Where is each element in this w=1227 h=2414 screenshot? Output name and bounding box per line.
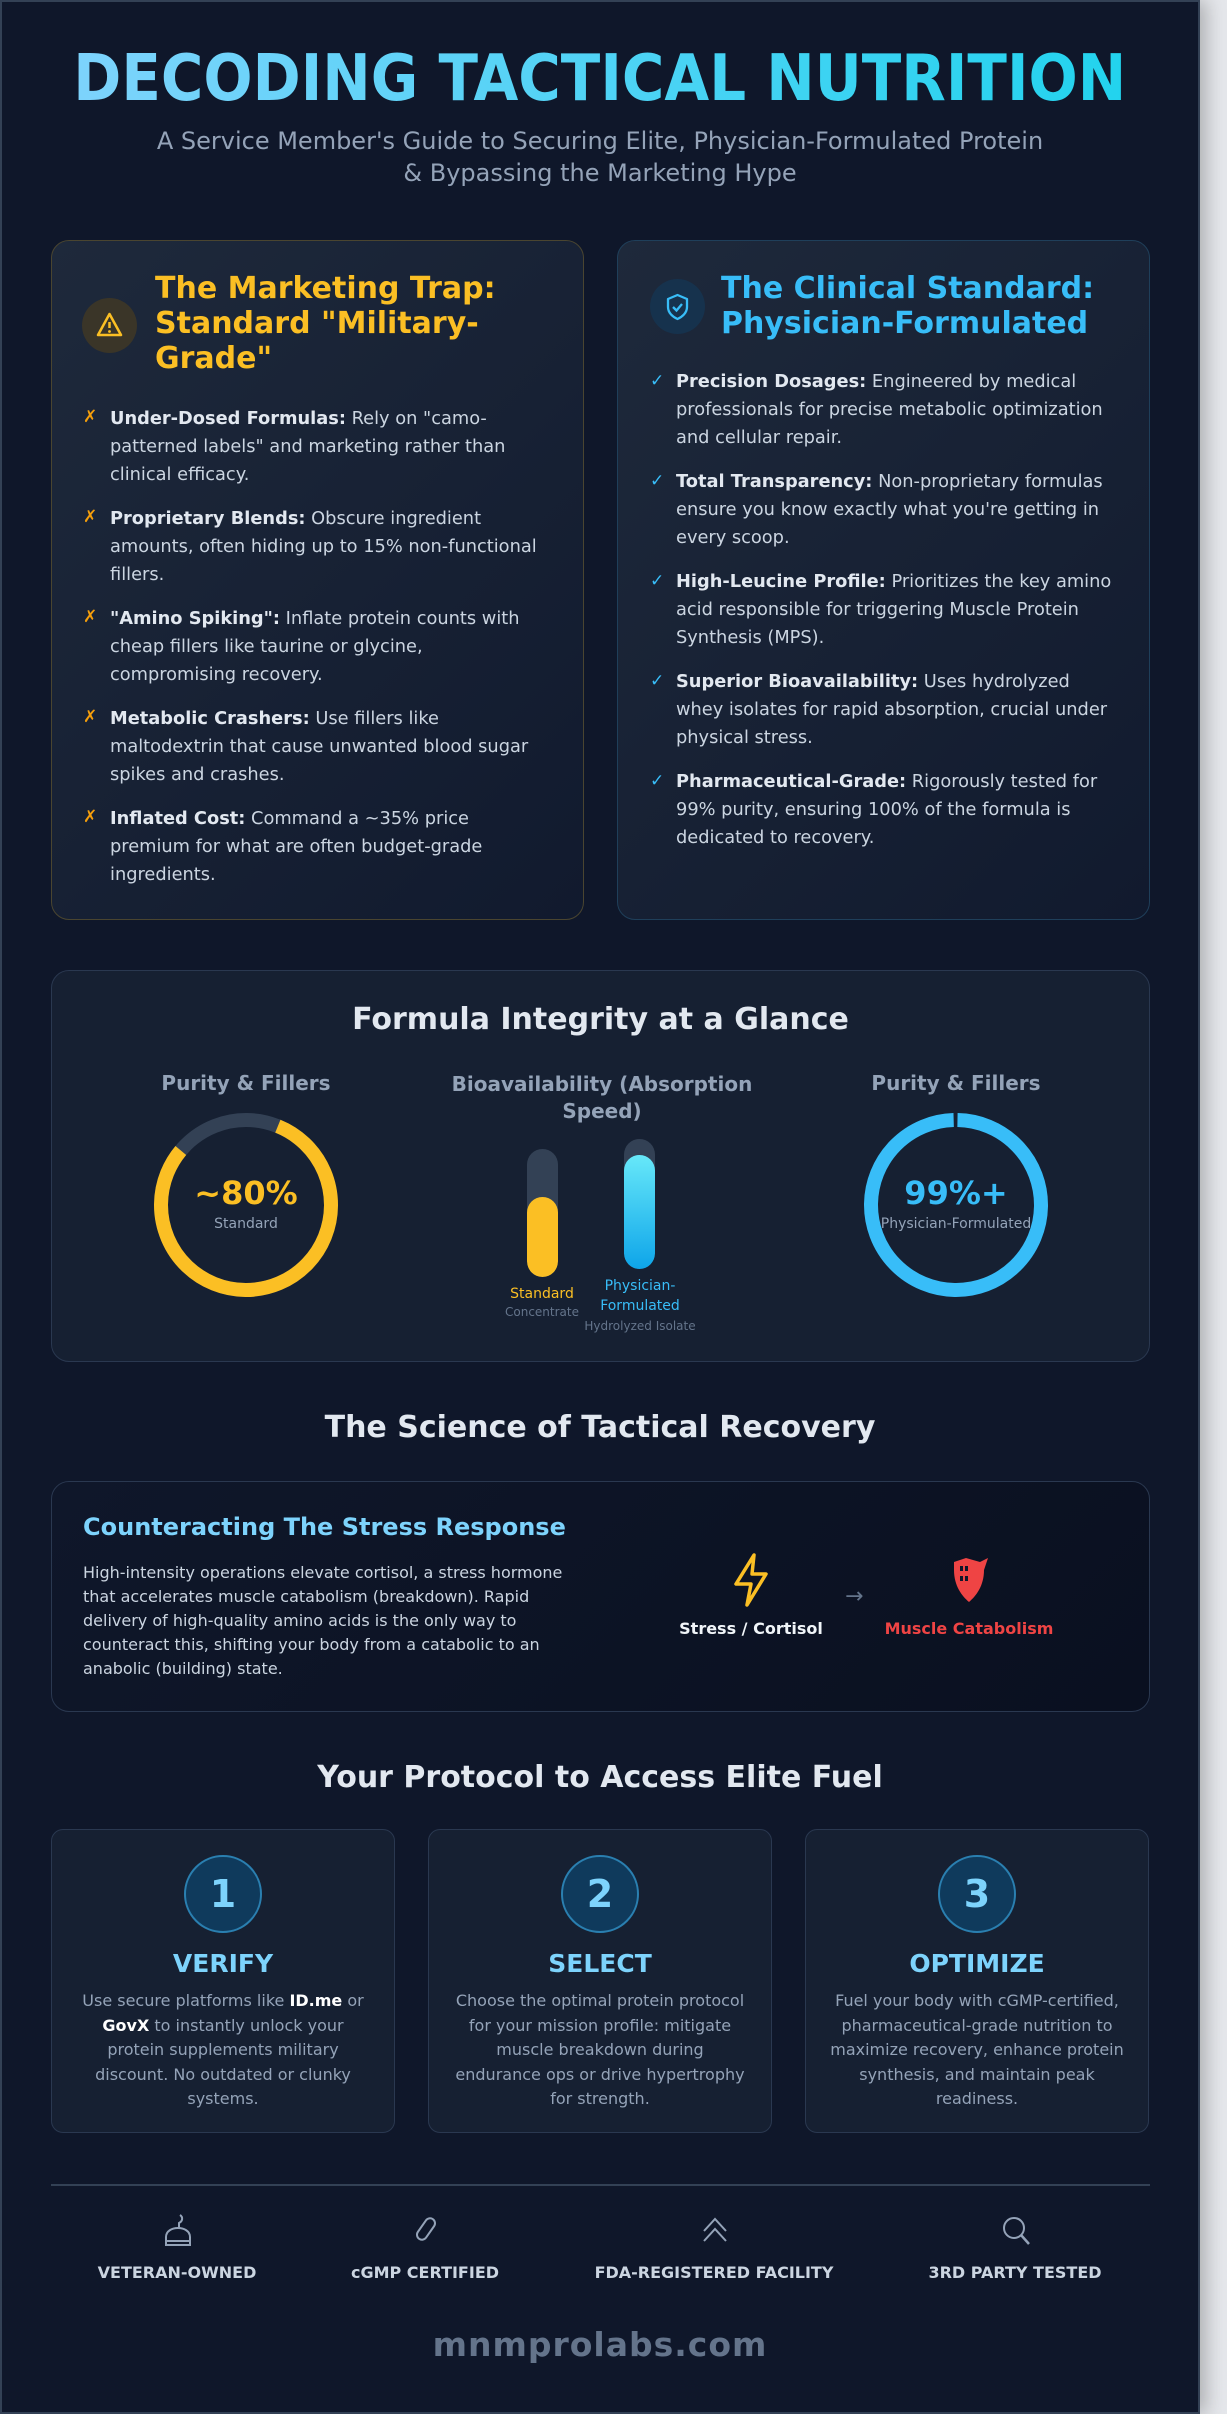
list: traps: fillers.: [110, 564, 164, 585]
chart: standard purity donut: [154, 1071, 338, 1297]
list: standards: Pharmaceutical-Grade: Rigorously tested for: [676, 771, 1097, 792]
panel: marketing trap: [51, 240, 584, 920]
card: verify: GovX to instantly unlock your: [102, 2016, 344, 2034]
heading: The Clinical Standard:: [721, 271, 1094, 306]
chart: physician purity donut: [864, 1071, 1048, 1297]
list: standards: physical stress.: [676, 727, 813, 748]
list: standards: [650, 371, 1111, 848]
icon: stress bolt: Stress / Cortisol: [679, 1619, 823, 1638]
chart: bioavailability bars: Standard: [510, 1286, 574, 1302]
card: select: [428, 1829, 772, 2133]
heading: Grade": [155, 341, 272, 376]
chart: bioavailability bars: Hydrolyzed Isolate: [584, 1319, 696, 1333]
card: select: Choose the optimal protein protocol: [456, 1991, 744, 2010]
list: traps: amounts, often hiding up to 15% non-functional: [110, 536, 537, 557]
heading: Physician-Formulated: [721, 306, 1088, 341]
list: traps: Inflated Cost: Command a ~35% price: [110, 808, 469, 829]
card: optimize: readiness.: [936, 2089, 1018, 2108]
icon: third party tested: [928, 2217, 1102, 2282]
list: standards: ✓: [650, 371, 664, 391]
heading: [155, 271, 496, 376]
card: select: for strength.: [550, 2089, 650, 2108]
list: standards: Synthesis (MPS).: [676, 627, 824, 648]
chart: physician purity donut: Physician-Formulated: [881, 1216, 1031, 1232]
list: standards: Precision Dosages: Engineered by medical: [676, 371, 1076, 392]
icon: cgmp: [351, 2217, 499, 2282]
chart: standard purity donut: ~80%: [194, 1174, 298, 1212]
list: standards: Superior Bioavailability: Uses hydrolyzed: [676, 671, 1070, 692]
card: select: for your mission profile: mitigate: [469, 2016, 731, 2034]
list: traps: cheap fillers like taurine or glycine,: [110, 636, 423, 657]
list: standards: and cellular repair.: [676, 427, 842, 448]
panel: clinical standard: [617, 240, 1150, 920]
chart: bioavailability bars: [452, 1072, 752, 1333]
chart: standard purity donut: Purity & Fillers: [161, 1071, 331, 1095]
list: traps: premium for what are often budget-grade: [110, 836, 482, 857]
text block: anabolic (building) state.: [83, 1659, 283, 1678]
card: verify: protein supplements military: [107, 2040, 339, 2059]
list: standards: 99% purity, ensuring 100% of the formula is: [676, 799, 1071, 820]
card: optimize: pharmaceutical-grade nutrition to: [841, 2016, 1113, 2034]
list: standards: Total Transparency: Non-proprietary formulas: [676, 471, 1103, 492]
list: traps: compromising recovery.: [110, 664, 323, 685]
title: DECODING TACTICAL NUTRITION: [74, 42, 1126, 116]
text block: that accelerates muscle catabolism (breakdown). Rapid: [83, 1587, 529, 1606]
list: standards: High-Leucine Profile: Prioritizes the key amino: [676, 571, 1111, 592]
list: standards: ✓: [650, 471, 664, 491]
icon: fda: FDA-REGISTERED FACILITY: [595, 2263, 833, 2282]
heading: The Marketing Trap:: [155, 271, 496, 306]
list: traps: [83, 407, 537, 885]
text block: delivery of high-quality amino acids is the only way to: [83, 1611, 516, 1630]
icon: fda: [595, 2218, 834, 2282]
panel: formula integrity: [51, 970, 1150, 1362]
list: traps: ingredients.: [110, 864, 216, 885]
card: select: endurance ops or drive hypertrophy: [455, 2064, 745, 2084]
list: standards: dedicated to recovery.: [676, 827, 874, 848]
list: traps: "Amino Spiking": Inflate protein counts with: [110, 608, 520, 629]
chart: physician purity donut: Purity & Fillers: [871, 1071, 1041, 1095]
heading: protocol: Your Protocol to Access Elite Fuel: [317, 1760, 883, 1795]
text block: counteract this, shifting your body from a catabolic to an: [83, 1635, 540, 1654]
list: standards: professionals for precise metabolic optimization: [676, 399, 1103, 420]
list: standards: ✓: [650, 771, 664, 791]
list: traps: Proprietary Blends: Obscure ingredient: [110, 508, 481, 529]
card: select: 2: [587, 1872, 613, 1916]
footer domain: mnmprolabs.com: [433, 2325, 767, 2364]
list: standards: acid responsible for triggering Muscle Protein: [676, 599, 1079, 620]
chart: bioavailability bars: Speed): [562, 1099, 642, 1123]
card: optimize: 3: [964, 1872, 990, 1916]
list: traps: ✗: [83, 607, 97, 627]
card: optimize: maximize recovery, enhance protein: [830, 2040, 1124, 2059]
card: verify: discount. No outdated or clunky: [95, 2064, 351, 2084]
heading: Formula Integrity at a Glance: [352, 1002, 849, 1037]
list: standards: every scoop.: [676, 527, 790, 548]
subtitle: A Service Member's Guide to Securing Elite, Physician-Formulated Protein: [157, 127, 1043, 155]
icon: stress bolt: [679, 1553, 823, 1638]
list: traps: spikes and crashes.: [110, 764, 284, 785]
heading: Counteracting The Stress Response: [83, 1513, 566, 1541]
list: traps: patterned labels" and marketing rather than: [110, 436, 505, 457]
chart: standard purity donut: Standard: [214, 1216, 278, 1232]
footer badges: [98, 2214, 1102, 2282]
heading: Standard "Military-: [155, 306, 479, 341]
text block: [83, 1563, 562, 1678]
card: optimize: [805, 1829, 1149, 2133]
arrow: →: [845, 1584, 863, 1609]
list: standards: whey isolates for rapid absorption, crucial under: [676, 699, 1107, 720]
heading: [721, 271, 1094, 341]
card: verify: [51, 1829, 395, 2133]
heading: science: The Science of Tactical Recovery: [325, 1410, 875, 1445]
card: optimize: OPTIMIZE: [909, 1949, 1045, 1978]
list: traps: clinical efficacy.: [110, 464, 249, 485]
icon: muscle catabolism: Muscle Catabolism: [885, 1619, 1053, 1638]
chart: bioavailability bars: Physician-: [605, 1278, 675, 1294]
icon: warning: [82, 298, 137, 353]
card: verify: systems.: [187, 2089, 259, 2108]
card: select: SELECT: [548, 1949, 652, 1978]
icon: veteran-owned: [98, 2214, 256, 2282]
subtitle: & Bypassing the Marketing Hype: [403, 159, 797, 187]
list: standards: ✓: [650, 571, 664, 591]
icon: third party tested: 3RD PARTY TESTED: [928, 2263, 1102, 2282]
card: optimize: synthesis, and maintain peak: [859, 2064, 1095, 2084]
icon: muscle catabolism: [885, 1558, 1053, 1638]
list: traps: ✗: [83, 407, 97, 427]
chart: physician purity donut: 99%+: [904, 1174, 1008, 1212]
list: traps: ✗: [83, 707, 97, 727]
icon: shield: [650, 279, 705, 334]
list: traps: Under-Dosed Formulas: Rely on "camo-: [110, 408, 487, 429]
text block: High-intensity operations elevate cortisol, a stress hormone: [83, 1563, 562, 1582]
card: verify: 1: [210, 1872, 236, 1916]
card: verify: VERIFY: [173, 1949, 273, 1978]
icon: veteran-owned: VETERAN-OWNED: [98, 2263, 256, 2282]
list: standards: ensure you know exactly what you're getting in: [676, 499, 1099, 520]
subtitle: [157, 127, 1043, 187]
chart: bioavailability bars: Concentrate: [505, 1305, 579, 1319]
list: traps: ✗: [83, 807, 97, 827]
card: optimize: Fuel your body with cGMP-certified,: [835, 1991, 1119, 2010]
chart: bioavailability bars: Bioavailability (Absorption: [452, 1072, 752, 1096]
list: traps: ✗: [83, 507, 97, 527]
list: traps: maltodextrin that cause unwanted blood sugar: [110, 736, 528, 757]
list: standards: ✓: [650, 671, 664, 691]
panel: stress response: [51, 1481, 1150, 1712]
card: select: muscle breakdown during: [496, 2040, 704, 2059]
list: traps: Metabolic Crashers: Use fillers like: [110, 708, 439, 729]
card: verify: Use secure platforms like ID.me or: [82, 1991, 364, 2010]
icon: cgmp: cGMP CERTIFIED: [351, 2263, 499, 2282]
chart: bioavailability bars: Formulated: [600, 1298, 680, 1314]
